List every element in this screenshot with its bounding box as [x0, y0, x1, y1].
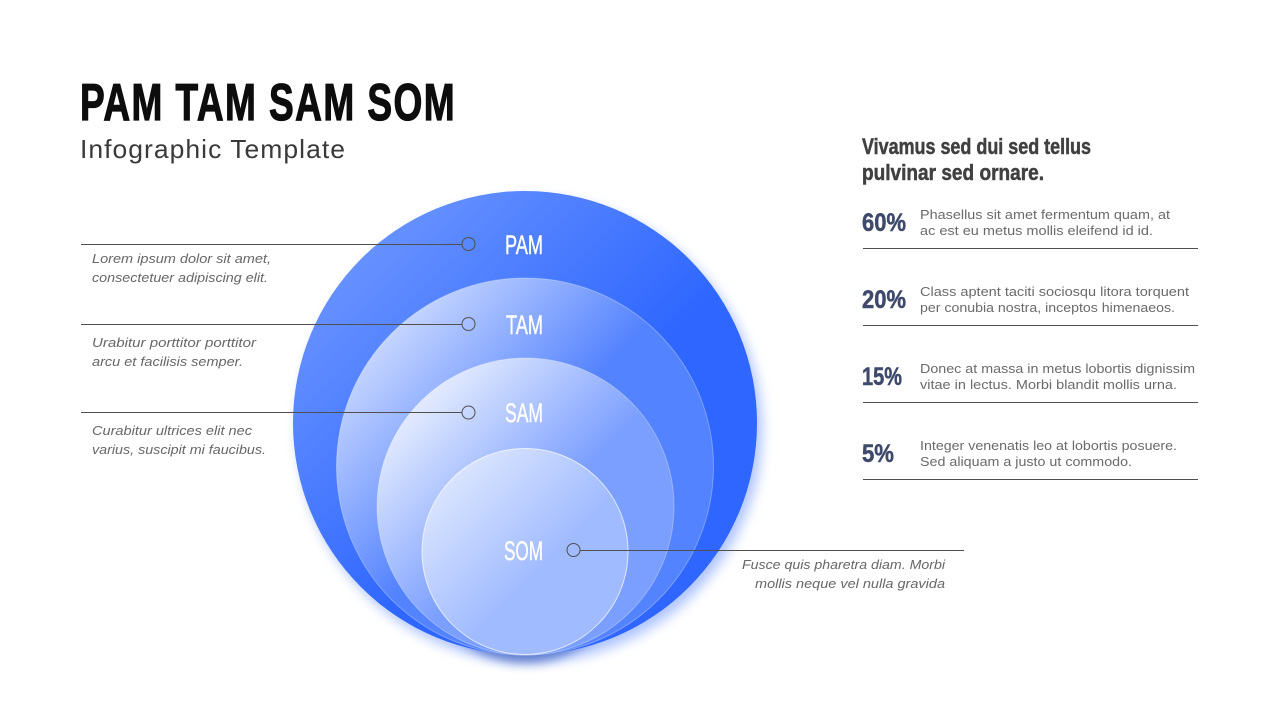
stat: 20%	[862, 284, 1198, 326]
stat: 20%: Class aptent taciti sociosqu litora torquent	[920, 284, 1189, 299]
label: TAM: TAM	[506, 310, 543, 340]
circle shadow	[298, 198, 762, 662]
callout: PAM: Lorem ipsum dolor sit amet,	[92, 252, 271, 266]
stat: 15%: Donec at massa in metus lobortis dignissim	[920, 361, 1195, 376]
stat: 20%: 20%	[862, 286, 906, 314]
callout: SOM: mollis neque vel nulla gravida	[755, 577, 945, 591]
circle: SOM	[422, 448, 628, 654]
stat: 15%: vitae in lectus. Morbi blandit mollis urna.	[920, 377, 1177, 392]
right heading: pulvinar sed ornare.	[862, 160, 1044, 185]
stat: 20%: per conubia nostra, inceptos himenaeos.	[920, 300, 1175, 315]
callout: SOM: Fusce quis pharetra diam. Morbi	[742, 558, 946, 572]
title: PAM TAM SAM SOM	[80, 74, 456, 132]
right heading: Vivamus sed dui sed tellus	[862, 134, 1091, 159]
stat: 15%: 15%	[862, 363, 902, 391]
stat: 60%	[862, 207, 1198, 248]
subtitle: Infographic Template	[80, 134, 346, 164]
stat: 5%	[862, 438, 1198, 480]
callout: PAM: consectetuer adipiscing elit.	[92, 271, 268, 285]
callout: SAM: varius, suscipit mi faucibus.	[92, 443, 266, 457]
callout: TAM	[81, 318, 475, 369]
stat: 60%: ac est eu metus mollis eleifend id id.	[920, 223, 1153, 238]
bottom shadow	[422, 457, 628, 663]
callout: SAM: Curabitur ultrices elit nec	[92, 424, 253, 438]
stat: 5%: Sed aliquam a justo ut commodo.	[920, 454, 1132, 469]
label: SAM: SAM	[505, 398, 543, 428]
stat: 60%: Phasellus sit amet fermentum quam, at	[920, 207, 1170, 222]
circle: PAM	[293, 191, 757, 655]
stat: 5%: 5%	[862, 440, 894, 468]
circle: SAM	[377, 358, 674, 655]
callout: SAM	[81, 406, 475, 457]
callout: SOM	[567, 544, 964, 591]
stat: 5%: Integer venenatis leo at lobortis posuere.	[920, 438, 1177, 453]
callout: TAM: arcu et facilisis semper.	[92, 355, 243, 369]
nested circles chart	[293, 191, 762, 663]
circle: TAM	[336, 278, 714, 655]
label: SOM: SOM	[504, 536, 543, 566]
label: PAM: PAM	[505, 230, 543, 260]
right heading	[862, 134, 1091, 185]
callout: TAM: Urabitur porttitor porttitor	[92, 336, 257, 350]
callout: PAM	[81, 238, 475, 285]
stat: 60%: 60%	[862, 209, 906, 237]
stat: 15%	[862, 361, 1198, 402]
